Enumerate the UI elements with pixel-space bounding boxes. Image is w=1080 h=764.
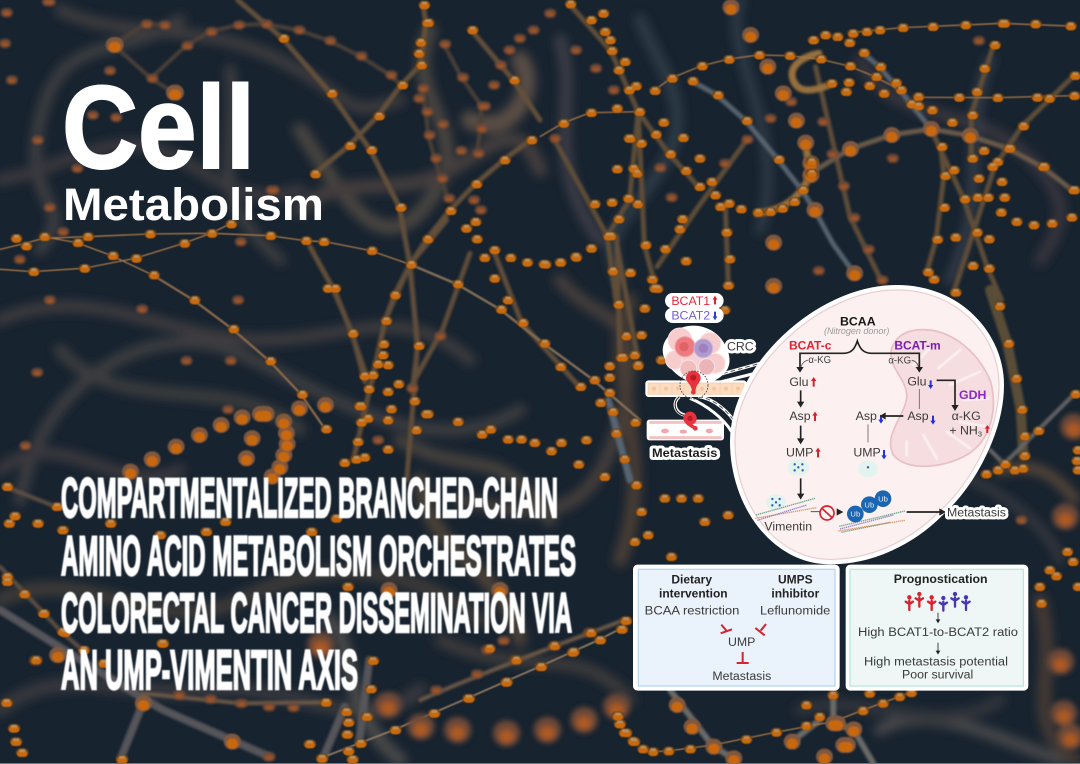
inhibition sign — [820, 506, 834, 520]
metabolite labels, cytosol: 3 — [978, 430, 982, 439]
down arrows — [937, 613, 939, 651]
logo word: Cell: Cell — [62, 62, 255, 194]
intervention text: Leflunomide — [760, 604, 830, 618]
Vimentin label: Vimentin — [764, 519, 812, 533]
metabolite labels, cytosol: Asp — [856, 409, 877, 423]
tumour: CRC — [647, 294, 754, 460]
GDH: GDH — [959, 388, 986, 402]
metabolite labels, cytosol: UMP — [853, 445, 881, 459]
CRC label: CRC — [727, 339, 754, 353]
gene labels: BCAT2 — [671, 309, 710, 323]
pathway arrows — [801, 380, 955, 512]
ubiquitin chain: Ub — [850, 510, 860, 519]
ubiquitin chain: Ub — [878, 494, 888, 503]
UMPS inhibitor heading — [771, 572, 820, 600]
graphical abstract — [647, 287, 1006, 562]
change arrows up — [811, 377, 990, 457]
metabolite labels, cytosol: + NH — [949, 424, 978, 438]
metabolite labels, cytosol: Asp — [907, 409, 929, 423]
branching bracket arrows — [800, 341, 919, 369]
dietary intervention heading: intervention — [659, 586, 728, 600]
bottom panels — [633, 565, 1028, 691]
prognostication text: High metastasis potential — [864, 654, 1008, 668]
logo: Cell Metabolism — [62, 62, 324, 230]
out of focus large beads — [320, 427, 1074, 740]
blood vessel — [647, 412, 724, 440]
BCAA heading: BCAA — [840, 314, 876, 328]
change arrows down — [878, 380, 936, 459]
intervention text — [645, 604, 830, 683]
inhibition marks — [721, 624, 766, 663]
gene labels — [671, 294, 717, 323]
tumour cells — [666, 328, 725, 377]
cell body — [732, 287, 1002, 562]
mitochondrion — [891, 330, 993, 466]
metabolite labels, cytosol: UMP — [786, 445, 813, 459]
panel: intervention — [633, 565, 840, 691]
metabolite labels, cytosol — [786, 374, 982, 459]
logo word: Metabolism: Metabolism — [63, 179, 324, 230]
Metastasis outcome: Metastasis — [947, 505, 1006, 519]
UMPS inhibitor heading: inhibitor — [771, 586, 820, 600]
title: AN UMP-VIMENTIN AXIS — [61, 638, 358, 701]
enlarged cell: α-KG — [888, 356, 911, 367]
intervention text: Metastasis — [712, 669, 771, 683]
nitrogen donor: (Nitrogen donor) — [824, 326, 889, 336]
title — [61, 466, 576, 701]
enlarged cell: BCAT-m — [894, 339, 941, 353]
tumour halo — [664, 327, 728, 382]
metabolite labels, cytosol: α-KG — [952, 409, 981, 423]
vimentin filament left — [755, 498, 817, 520]
prognostication text: Poor survival — [902, 668, 973, 682]
UMPS inhibitor heading: UMPS — [778, 572, 813, 586]
metabolite labels, cytosol: Glu — [789, 375, 809, 389]
epithelium — [647, 382, 745, 396]
prognostication text — [858, 625, 1018, 682]
enlarged cell — [732, 287, 1006, 562]
UMP pools — [766, 459, 878, 510]
metabolite labels, cytosol: Glu — [907, 374, 927, 388]
intervention text: BCAA restriction — [645, 604, 739, 618]
prognostication text: High BCAT1-to-BCAT2 ratio — [858, 625, 1018, 639]
ubiquitin chain — [838, 490, 905, 532]
invading tumour cell — [680, 371, 708, 399]
ubiquitin chain: Ub — [864, 500, 874, 509]
intervention text: UMP — [728, 635, 755, 649]
dietary intervention heading — [659, 572, 728, 600]
connector dashes — [690, 361, 768, 432]
people icons — [906, 592, 970, 611]
enzymes: BCAT-c — [789, 339, 832, 353]
metabolite labels, cytosol: Asp — [789, 409, 811, 423]
gene labels: BCAT1 — [671, 294, 710, 308]
alpha-KG: α-KG — [808, 355, 831, 366]
prognostication heading: Prognostication — [894, 572, 988, 586]
panel: prognostication — [846, 565, 1028, 691]
Metastasis label: Metastasis — [652, 447, 717, 460]
arrow to metastasis — [675, 397, 687, 416]
dietary intervention heading: Dietary — [671, 572, 712, 586]
